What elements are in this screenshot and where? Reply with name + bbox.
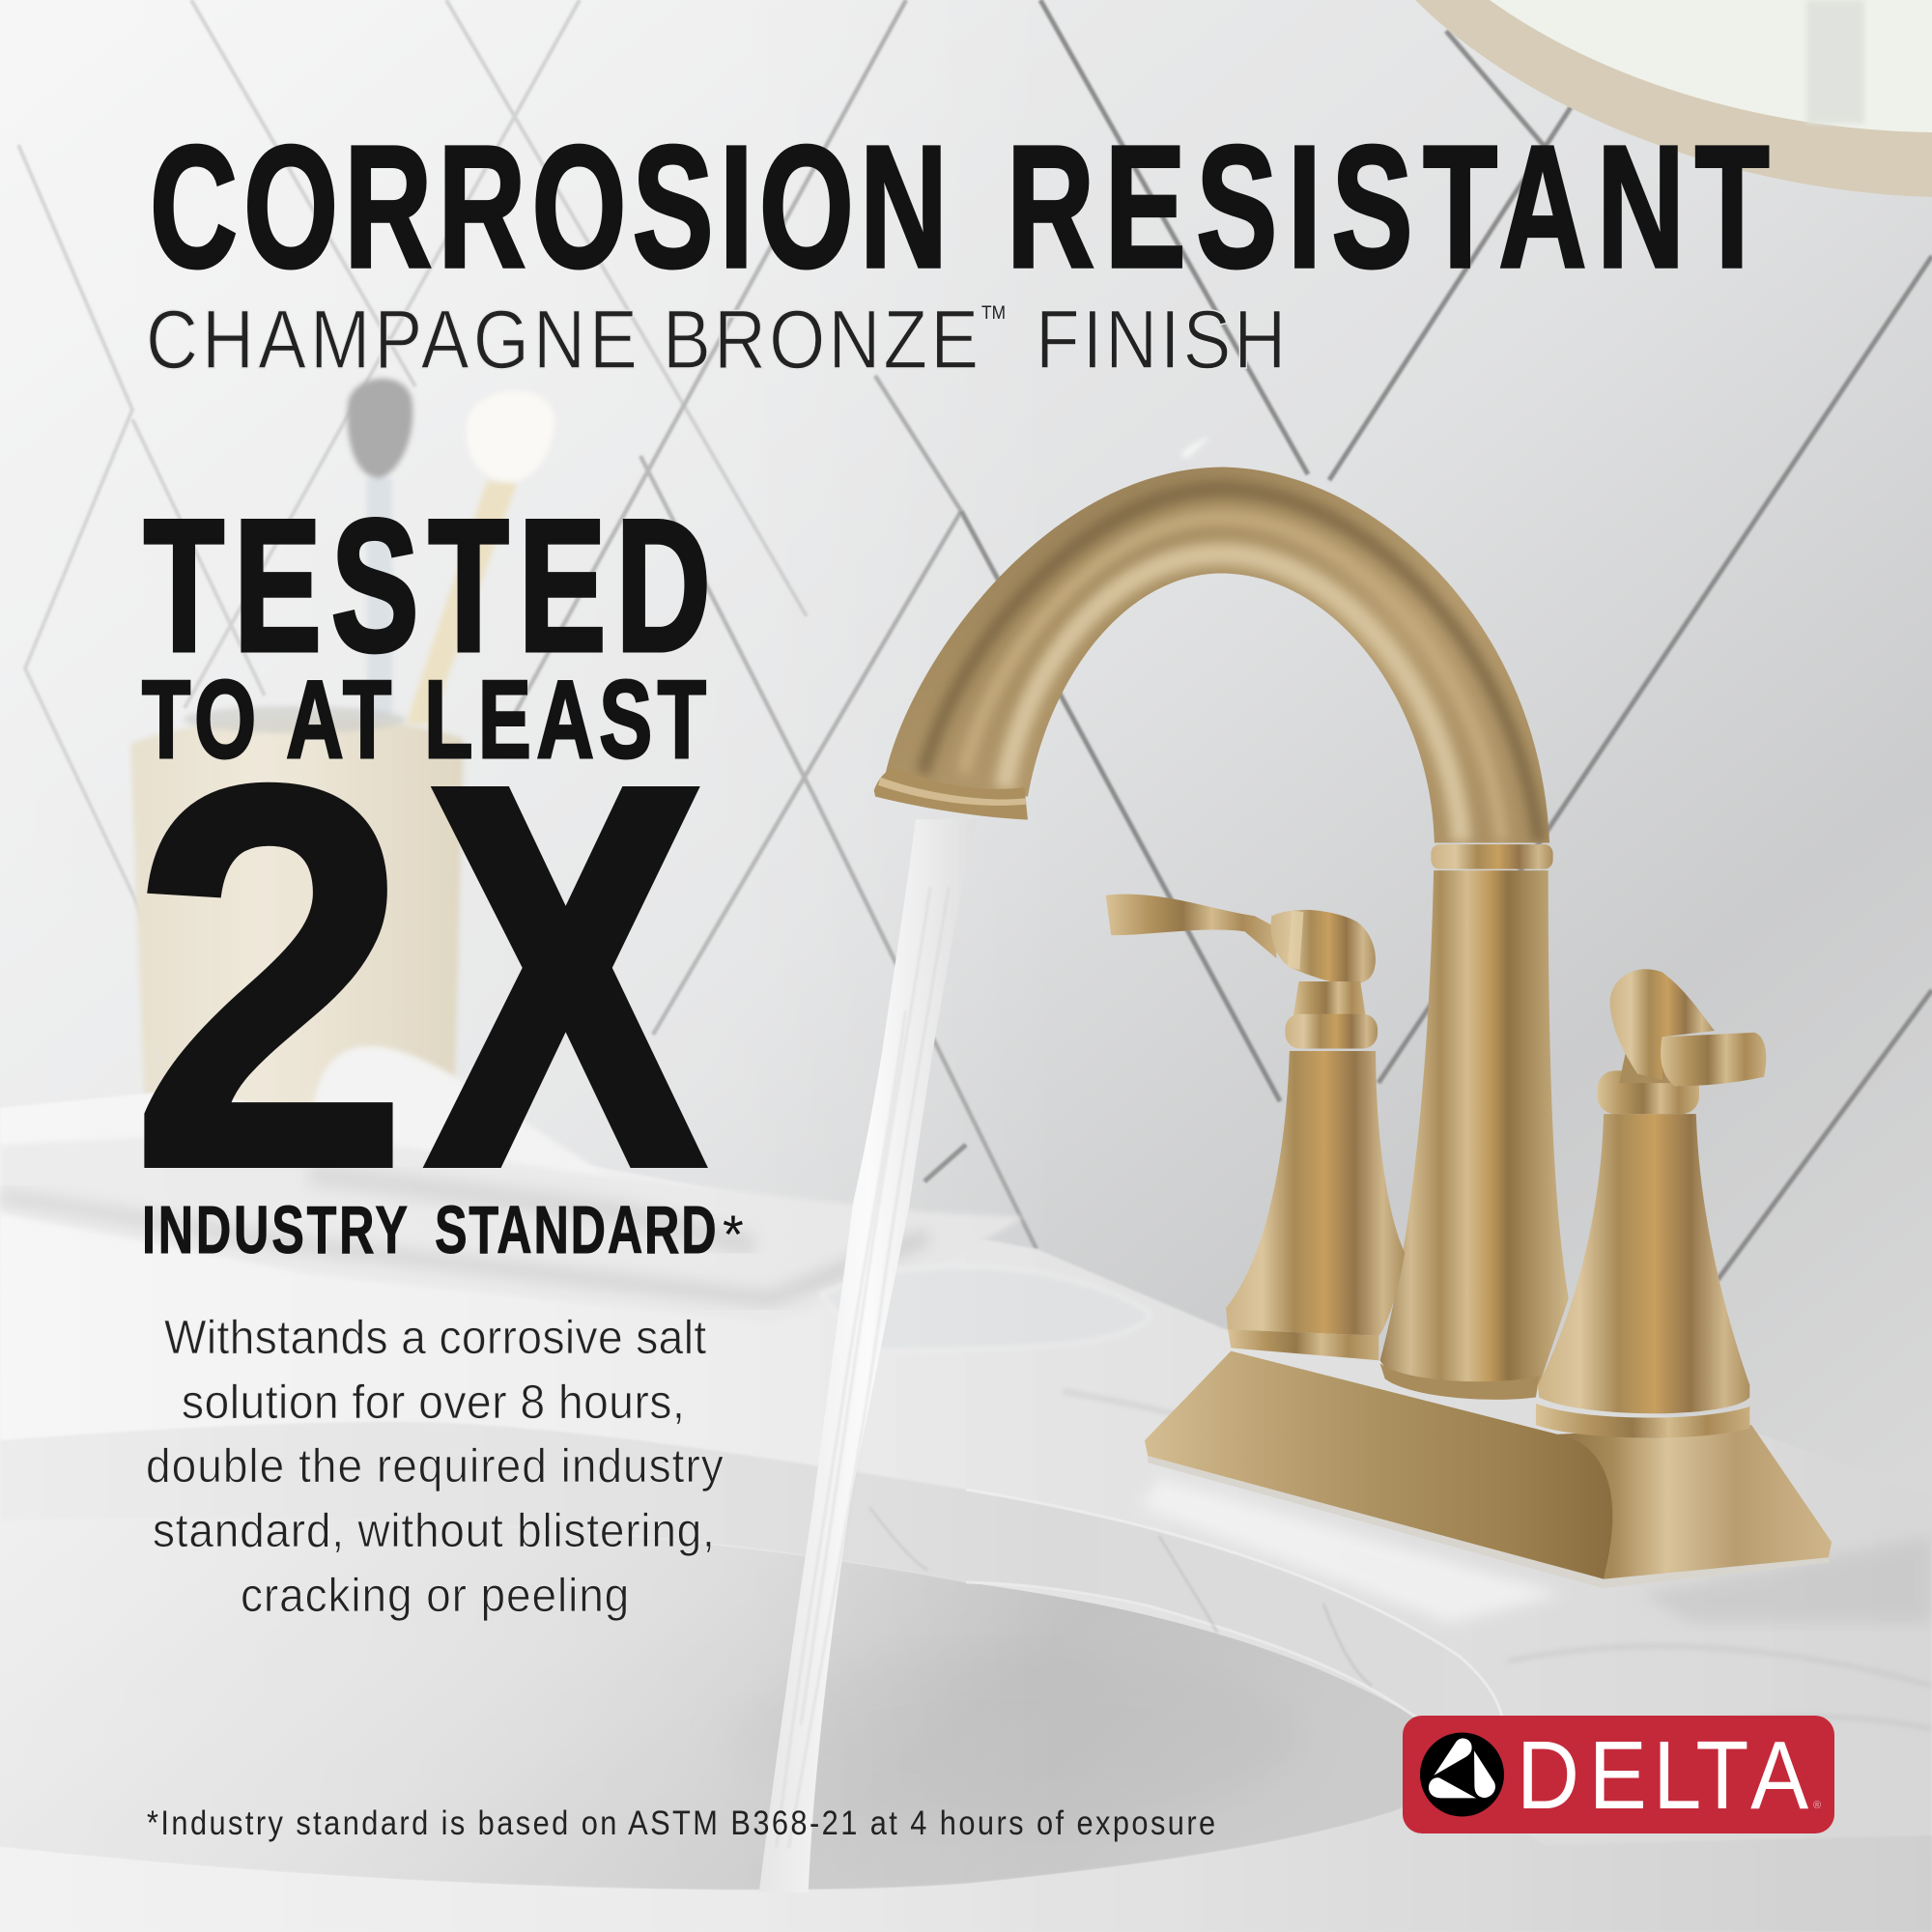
lower faucet valves bbox=[1226, 969, 1766, 1438]
body paragraph: double the required industry bbox=[146, 1440, 724, 1492]
headline: to at least: TO AT LEAST bbox=[142, 659, 706, 781]
lip highlight bbox=[878, 778, 1027, 806]
body paragraph: standard, without blistering, bbox=[153, 1505, 715, 1557]
soft wash over left side bbox=[0, 0, 1063, 1932]
column rings bbox=[1380, 1363, 1539, 1400]
big number: 2X: 2 bbox=[128, 670, 412, 1282]
faucet base and column bbox=[1145, 870, 1832, 1588]
spout lip bbox=[874, 767, 1028, 820]
body paragraph: cracking or peeling bbox=[241, 1570, 629, 1622]
left bell bbox=[1226, 1051, 1405, 1336]
puddle on counter bbox=[821, 1266, 1151, 1350]
base shadow on marble bbox=[1140, 1478, 1932, 1623]
mirror frame bbox=[1415, 0, 1932, 197]
headline: industry standard: * bbox=[723, 1204, 744, 1264]
left lever bbox=[1106, 895, 1276, 958]
big number: 2X: X bbox=[433, 683, 700, 1270]
sink rim bbox=[0, 1422, 1504, 1729]
right handle head bbox=[1661, 1033, 1766, 1086]
right bell bbox=[1538, 1114, 1749, 1413]
column collar bbox=[1431, 844, 1553, 869]
subtitle: finish name: BRONZE bbox=[663, 294, 979, 386]
toothbrushes bbox=[348, 379, 554, 724]
base front bbox=[1145, 1351, 1612, 1579]
left knob bbox=[1271, 910, 1376, 984]
soap bar bbox=[314, 1046, 618, 1183]
headline: industry standard: STANDARD bbox=[435, 1192, 717, 1267]
title: corrosion resistant: RESISTANT bbox=[1007, 109, 1770, 303]
headline: industry standard bbox=[142, 1192, 744, 1267]
column bbox=[1380, 870, 1569, 1385]
Delta logo bbox=[1403, 1716, 1834, 1833]
right neck bbox=[1619, 1040, 1674, 1083]
title: corrosion resistant bbox=[150, 109, 1770, 303]
base right bbox=[1557, 1425, 1832, 1579]
headline: tested: TESTED bbox=[144, 481, 711, 691]
counter top bbox=[0, 1090, 1932, 1932]
title: corrosion resistant: CORROSION bbox=[150, 109, 948, 303]
marble veins bbox=[966, 1391, 1932, 1918]
tiled wall bbox=[0, 0, 1932, 1546]
body paragraph bbox=[146, 1312, 724, 1622]
left collar bbox=[1285, 1014, 1378, 1048]
body paragraph: solution for over 8 hours, bbox=[182, 1377, 685, 1429]
right ring bbox=[1536, 1404, 1749, 1438]
headline: industry standard: INDUSTRY bbox=[142, 1192, 408, 1267]
subtitle: finish name: CHAMPAGNE bbox=[146, 294, 638, 386]
spout arc bbox=[886, 467, 1549, 843]
right blade bbox=[1610, 969, 1715, 1080]
knob ring bbox=[1288, 911, 1303, 970]
logo badge bbox=[1403, 1716, 1834, 1833]
icon: delta emblem bbox=[1420, 1733, 1504, 1816]
running water bbox=[759, 819, 977, 1892]
faucet bbox=[874, 467, 1832, 1588]
registered mark: ® bbox=[1813, 1800, 1821, 1811]
left neck bbox=[1293, 981, 1367, 1021]
counter front edge bbox=[0, 1787, 1932, 1932]
cup bbox=[130, 706, 464, 1111]
base strip bbox=[1148, 1456, 1830, 1588]
body paragraph: Withstands a corrosive salt bbox=[164, 1312, 706, 1364]
basin bbox=[0, 1517, 1468, 1890]
soap dish bbox=[0, 1130, 1024, 1323]
big number: 2X bbox=[128, 670, 700, 1282]
right collar bbox=[1598, 1070, 1699, 1114]
footnote: *Industry standard is based on ASTM B368-21 at 4 hours of exposure bbox=[147, 1804, 1215, 1841]
left ring bbox=[1228, 1329, 1378, 1360]
soft basin shadow bbox=[724, 1652, 1304, 1826]
subtitle: finish name: FINISH bbox=[1036, 294, 1286, 386]
subtitle: finish name: TM bbox=[981, 303, 1006, 324]
subtitle: finish name bbox=[146, 294, 1286, 386]
wordmark: DELTA bbox=[1517, 1722, 1809, 1830]
upper faucet bbox=[874, 467, 1553, 984]
